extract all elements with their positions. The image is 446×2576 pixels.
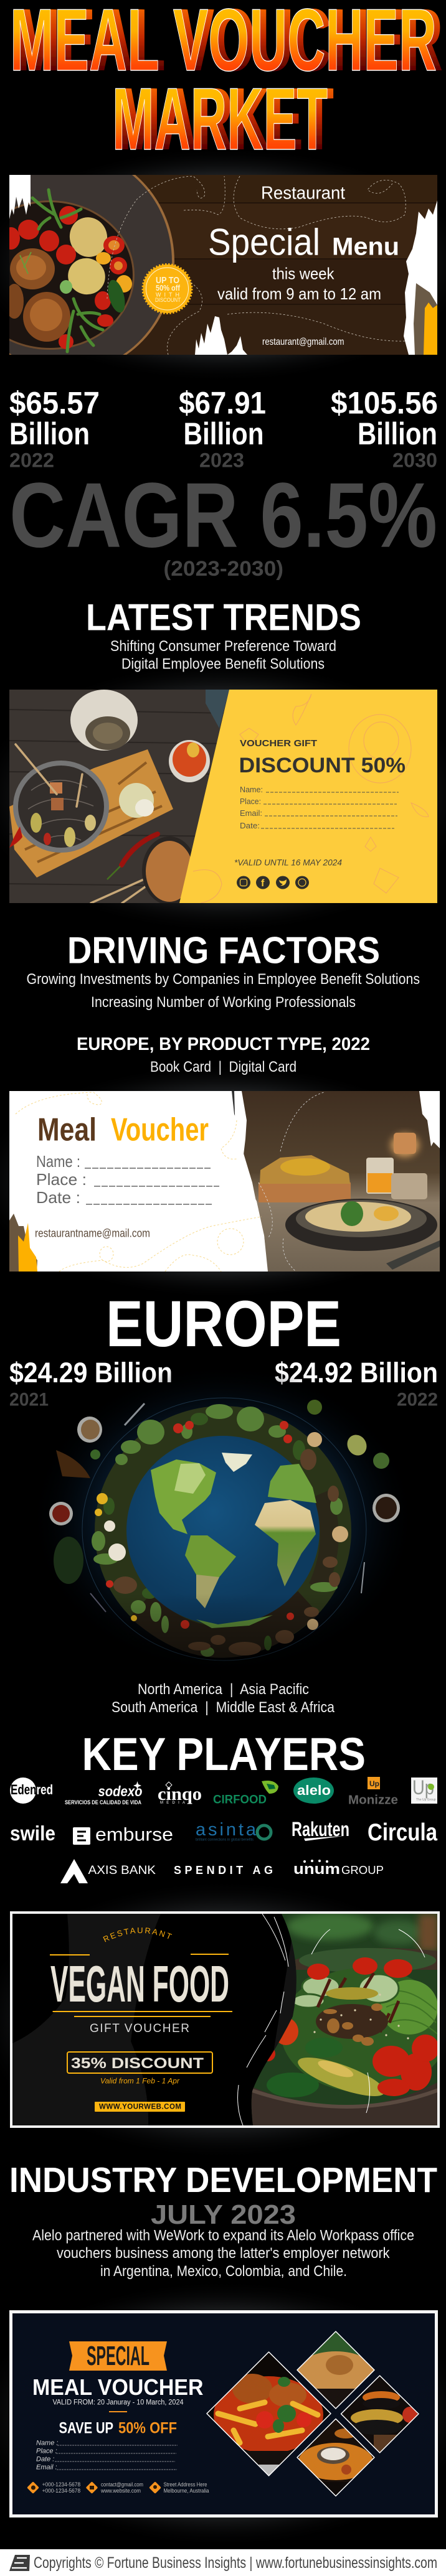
logo: Unum Group: GROUP [341,1864,384,1876]
voucher text: restaurant@gmail.com [262,337,344,347]
heading: Europe: EUROPE [106,1288,341,1361]
voucher form: Place: [240,797,261,806]
validity line: VALID FROM: 20 Januray - 10 March, 2024 [52,2399,184,2406]
save up offer: SAVE UP [59,2420,113,2437]
validity: Valid from 1 Feb - 1 Apr [100,2076,180,2085]
card heading: Meal [37,1112,97,1148]
discount badge: WITH [156,291,179,297]
Europe value 2021: $24.29 Billion [9,1357,173,1389]
form fields: Name : [36,2440,58,2447]
market value 2030 [331,385,438,471]
product types: Book Card | Digital Card [150,1059,297,1075]
avocado fan [381,1980,438,2035]
logo: Emburse: emburse [95,1825,173,1845]
logo: Alelo [293,1777,334,1804]
sauce [318,1973,399,2032]
gift voucher label: GIFT VOUCHER [90,2022,189,2035]
voucher form: Name: [240,785,263,794]
validity note: *VALID UNTIL 16 MAY 2024 [234,858,342,868]
logo: Cinqo: cinqo [158,1784,202,1804]
diamond photo: pasta [207,2352,331,2476]
logo: Up Group: Up [412,1776,434,1799]
card form: Date : [36,1188,80,1207]
form fields [36,2440,178,2471]
contact row: Melbourne, Australia [163,2488,209,2494]
logo: Cirfood [213,1781,278,1806]
heading: driving factors: DRIVING FACTORS [67,930,380,971]
logo: Asintao: asinta [196,1820,257,1840]
panel: vegan food gift voucher [10,1911,440,2128]
logo: Monizze: Monizze [348,1794,398,1807]
logo: Unum Group [293,1860,384,1878]
salad photo [249,1913,446,2127]
yellow voucher panel [179,690,437,903]
logo: Monizze [348,1777,398,1807]
voucher text [208,184,399,347]
development text: vouchers business among the latter's employer network [57,2245,390,2262]
noodle bowl [13,761,109,853]
logo: Sodexo [65,1781,142,1806]
market value 2030: $105.56 [331,385,438,420]
market value 2022 [9,385,100,471]
logo: Cinqo: MEDIA [160,1801,185,1805]
contact row: +000-1234-5678 [42,2481,80,2488]
market value 2023: 2023 [199,449,244,471]
logo: Unum Group: unum [293,1861,340,1878]
pepper bowl [169,740,210,782]
logo: Sodexo: SERVICIOS DE CALIDAD DE VIDA [65,1799,141,1806]
special banner: SPECIAL [87,2341,149,2371]
regions list [112,1681,335,1716]
development text: in Argentina, Mexico, Colombia, and Chile. [100,2263,347,2280]
rice bowl [142,836,192,903]
driving factors text: Increasing Number of Working Professionals [91,994,356,1011]
globe surrounded by food [30,1363,416,1674]
logo: Edenred: Edenred [11,1782,53,1797]
logo: Up Group: The Up Group [416,1798,436,1802]
discount box [67,2052,212,2073]
card form [37,1156,219,1205]
title line 2 [112,70,328,169]
tomatoes [307,1957,439,2096]
heading: Europe by product type: EUROPE, BY PRODUCT TYPE, 2022 [77,1034,370,1054]
social icons: f [261,878,265,889]
logo: Rakuten: Rakuten [292,1818,349,1840]
avocado slices [298,2058,384,2096]
contact row: +000-1234-5678 [42,2488,80,2494]
bowl [250,2082,439,2127]
form fields: Date : [36,2456,54,2463]
contact row: Street Address Here [163,2481,207,2488]
form fields: Email : [36,2464,57,2471]
card email: restaurantname@mail.com [35,1227,150,1240]
logo: Swile: swile [10,1822,55,1845]
CAGR period: (2023-2030) [163,557,283,581]
panel: special meal voucher [11,2311,436,2516]
footer bar [0,2549,446,2576]
card form: Name : [36,1152,80,1171]
voucher heading [240,740,405,773]
market value 2030: 2030 [392,449,437,471]
icon: Fortune Business Insights logo [9,2555,30,2571]
card heading: Voucher [111,1112,209,1148]
panel: discount voucher [9,690,437,905]
regions list: North America | Asia Pacific [138,1681,309,1698]
voucher form: Email: [240,808,262,818]
logo: Sodexo: sodexo [98,1783,142,1799]
title [10,0,437,169]
market value 2023 [179,385,266,471]
voucher text: valid from 9 am to 12 am [217,284,381,303]
heading: key players: KEY PLAYERS [82,1728,366,1780]
card heading [39,1117,208,1141]
market value 2022: $65.57 [9,385,100,420]
voucher form [240,785,399,830]
social icons [237,876,309,889]
Europe value 2021 [9,1357,173,1410]
discount badge: DISCOUNT [155,297,181,303]
regions list: South America | Middle East & Africa [112,1699,335,1716]
form fields: Place : [36,2448,57,2455]
voucher form: Date: [240,821,260,830]
diamond photo: rice [297,2331,374,2409]
latest trends text: Shifting Consumer Preference Toward [110,638,336,655]
market value 2023: Billion [183,416,264,451]
logo: Asintao: brilliant connections in global benefits [196,1838,254,1842]
Europe value 2021: 2021 [9,1389,49,1410]
diamond photo: curry [297,2419,374,2496]
chopsticks [16,744,149,903]
discount badge: UP TO [156,275,179,286]
website button: WWW.YOURWEB.COM [99,2104,181,2111]
logo: Alelo: alelo [297,1782,331,1798]
voucher text: Special [208,222,320,263]
logo: Spendit AG: SPENDIT AG [174,1864,273,1876]
dumplings [119,783,154,818]
plate with food [9,175,174,355]
contact row: contact@gmail.com [101,2481,143,2488]
market value 2023: $67.91 [179,385,266,420]
voucher heading: VOUCHER GIFT [240,738,317,749]
seed bowl [70,690,138,751]
panel: meal voucher card [9,1091,440,1272]
save up offer [59,2420,177,2437]
voucher heading: DISCOUNT 50% [239,754,406,777]
driving factors text [26,971,420,1011]
latest trends text [110,638,336,672]
food photo [240,1091,440,1272]
panel: vegan food gift voucher: RESTAURANT [103,1927,172,1942]
website button [95,2102,185,2112]
logo: Edenred [10,1777,53,1804]
voucher text: Restaurant [261,184,345,204]
market value 2022: 2022 [9,449,54,471]
discount badge: 50% off [156,283,181,293]
earth [126,1436,320,1628]
Europe value 2022 [275,1357,438,1410]
panel: restaurant special menu voucher [9,175,437,355]
meal voucher heading: MEAL VOUCHER [32,2374,203,2400]
dashed decoration [16,1092,262,1272]
heading: latest trends: LATEST TRENDS [86,596,361,639]
brush edge [232,1091,235,1117]
hand-drawn strokes [238,1914,425,2125]
logo: Axis Bank: AXIS BANK [88,1864,156,1877]
Europe value 2022: 2022 [397,1389,438,1410]
latest trends text: Digital Employee Benefit Solutions [121,656,325,672]
food ring [92,1404,348,1657]
nuts and seeds [316,2004,388,2039]
cucumbers [292,1974,399,2008]
contact row [27,2481,209,2494]
save up offer: 50% OFF [118,2420,177,2437]
logo: Axis Bank [60,1859,156,1883]
arched restaurant label [102,1933,179,1944]
special banner [69,2341,167,2371]
cutting board [9,749,173,878]
card form: Place : [36,1170,87,1189]
development text [32,2227,414,2280]
discount badge [143,265,192,313]
vegan food heading: VEGAN FOOD [50,1955,229,2013]
development date: JULY 2023 [151,2199,296,2230]
logo: Monizze: Up [369,1779,379,1788]
logo: Cirfood: CIRFOOD [213,1794,267,1806]
discount box: 35% DISCOUNT [71,2055,204,2072]
voucher text: Menu [332,233,399,260]
diamond photo: bowls [341,2376,419,2453]
voucher text: this week [272,264,334,283]
market value 2022: Billion [9,416,90,451]
red chili [121,834,158,865]
logos: key players [10,1776,437,1883]
outer food items [49,1400,400,1612]
contact row: www.website.com [100,2488,141,2494]
